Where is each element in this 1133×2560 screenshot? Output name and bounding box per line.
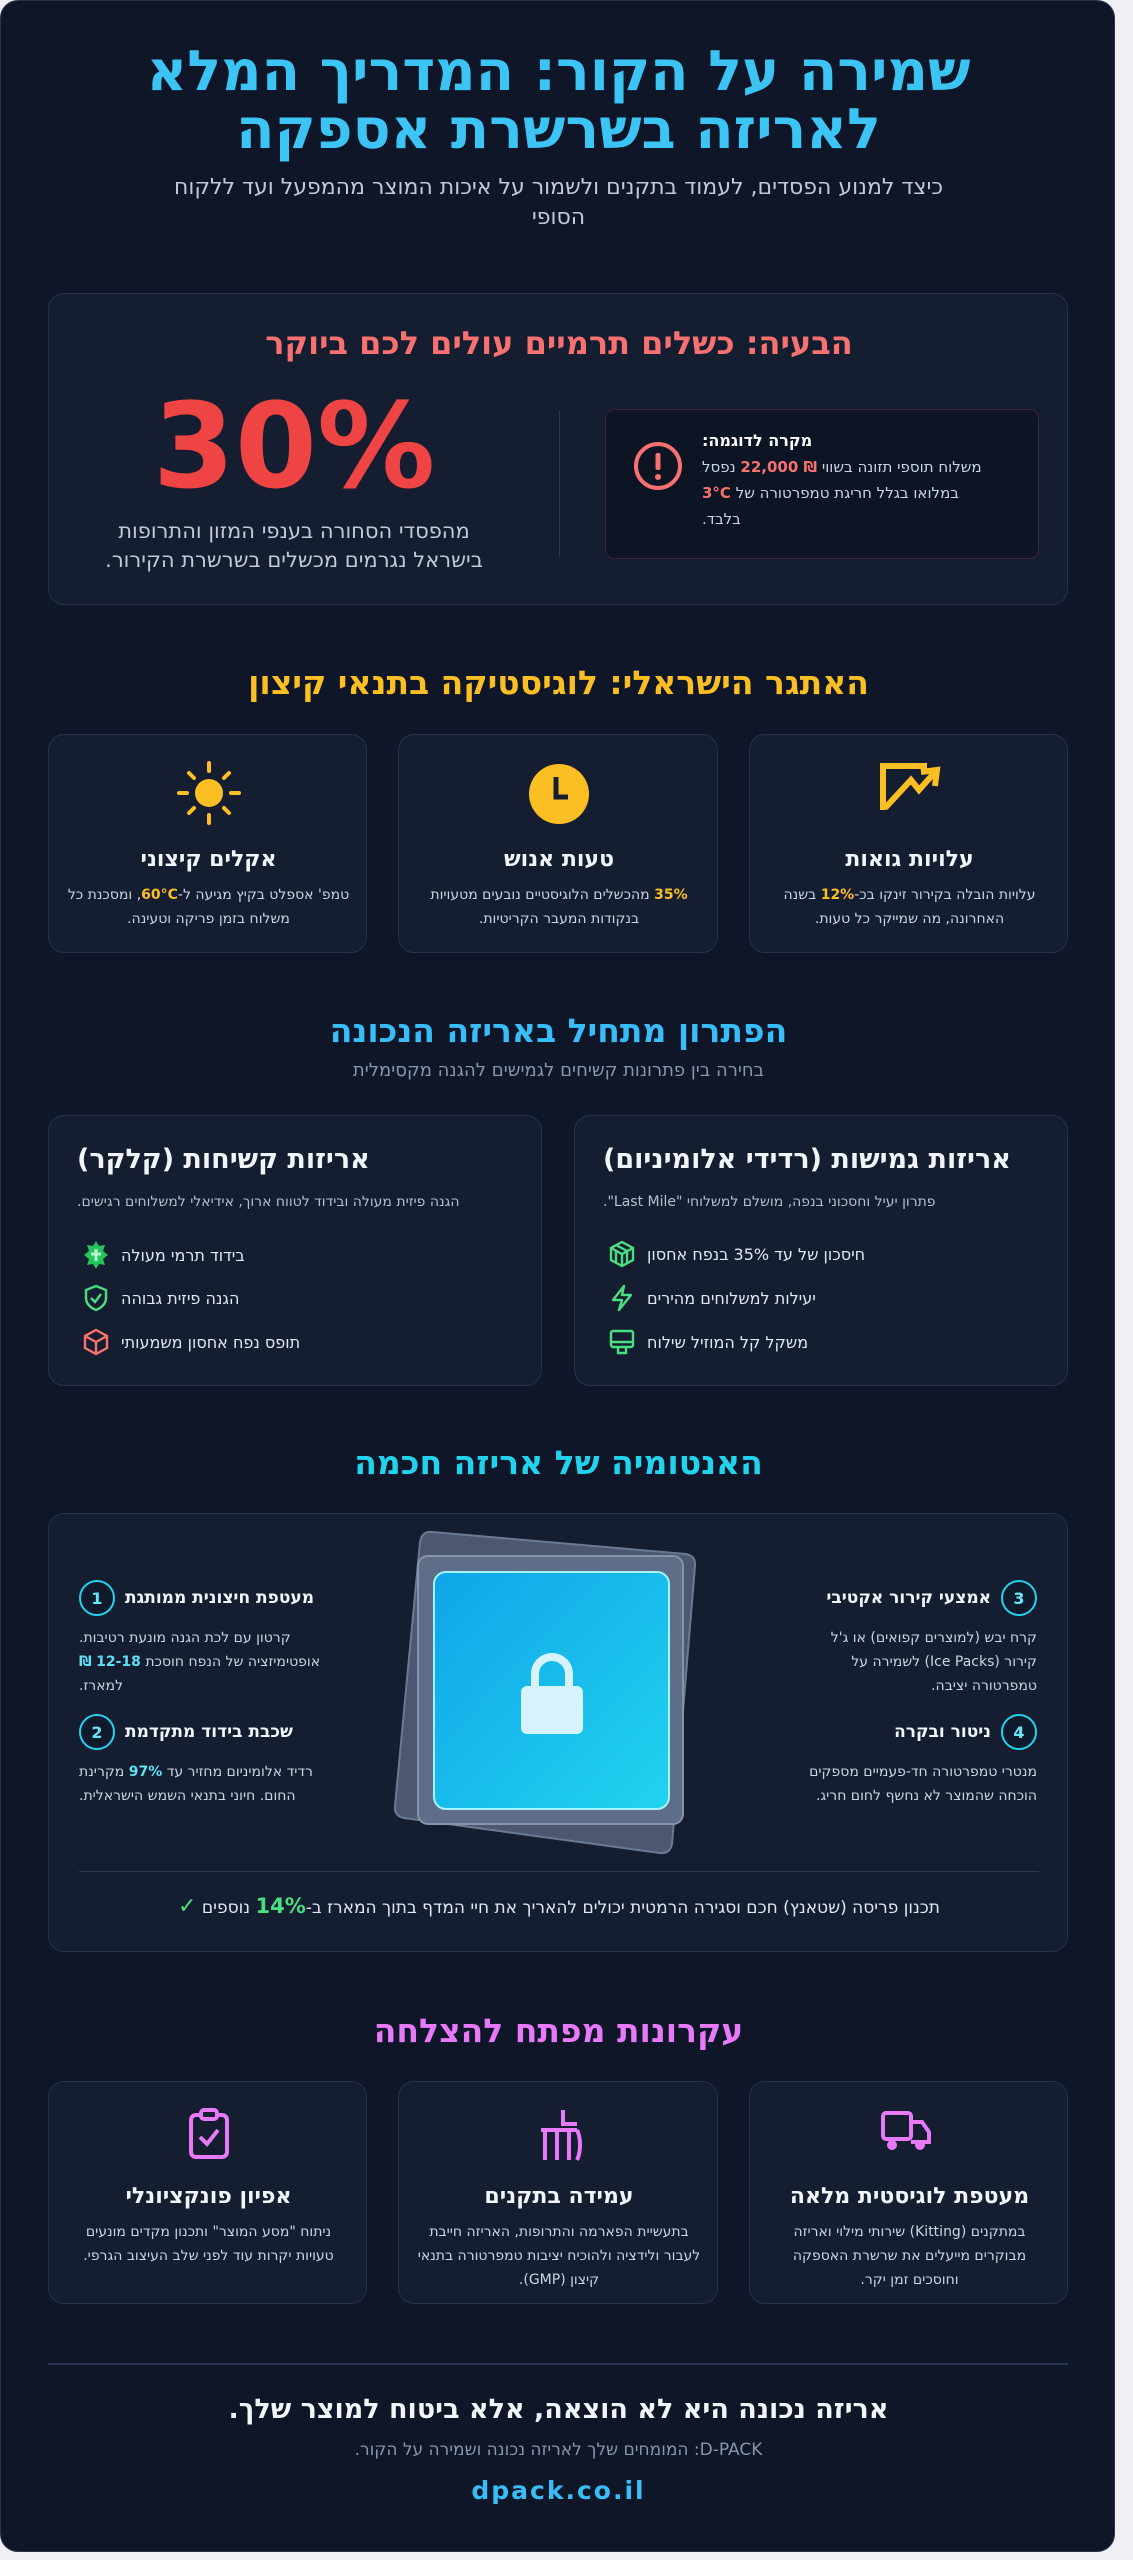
- footer url: dpack.co.il: [471, 2476, 646, 2505]
- item 2: insulation layer: 2: [91, 1722, 103, 1742]
- card: functional spec: אפיון פונקציונלי: [125, 2184, 292, 2209]
- title: שמירה על הקור: המדריך המלא: [146, 39, 970, 104]
- item: protection: הגנה פיזית גבוהה: [121, 1288, 239, 1308]
- panel: flexible packaging: פתרון יעיל וחסכוני בנפה, מושלם למשלוחי "Last Mile".: [603, 1194, 936, 1210]
- item 2: insulation layer: רדיד אלומיניום מחזיר עד 97% מקרינת החום. חיוני בתנאי השמש הישראלית.: [79, 1764, 313, 1804]
- item 3: active cooling: קרח יבש (למוצרים קפואים) או ג'ל קירור (Ice Packs) לשמירה על טמפרטורה יציבה.: [831, 1630, 1037, 1694]
- card: full logistics: מעטפת לוגיסטית מלאה: [790, 2184, 1029, 2209]
- icon: trending: [880, 763, 940, 810]
- card: costs: [749, 734, 1068, 953]
- heading: problem: הבעיה: כשלים תרמיים עולים לכם ביוקר: [265, 324, 853, 362]
- icon: alert: [634, 442, 682, 490]
- item 4: monitoring: מנטרי טמפרטורה חד-פעמיים מספקים הוכחה שהמוצר לא נחשף לחום חריג.: [809, 1764, 1037, 1804]
- panel: flexible packaging: אריזות גמישות (רדידי אלומיניום): [603, 1144, 1011, 1175]
- item 4: monitoring: 4: [1013, 1722, 1025, 1742]
- icon: clipboard: [189, 2108, 229, 2159]
- item 4: monitoring: [809, 1714, 1037, 1804]
- card: costs: עלויות הובלה בקירור זינקו בכ-12% בשנה האחרונה, מה שמייקר כל טעות.: [783, 887, 1036, 927]
- item 1: outer shell: [79, 1580, 320, 1694]
- heading: solution: הפתרון מתחיל באריזה הנכונה: [330, 1011, 787, 1050]
- panel: flexible packaging: [574, 1115, 1068, 1386]
- icon: sun: [177, 761, 241, 825]
- item 4: monitoring: ניטור ובקרה: [894, 1722, 991, 1742]
- item: insulation: בידוד תרמי מעולה: [121, 1246, 245, 1264]
- title: [146, 39, 970, 162]
- title: לאריזה בשרשרת אספקה: [236, 97, 881, 162]
- card: functional spec: ניתוח "מסע המוצר" ותכנון מקדים מונעים טעויות יקרות עוד לפני שלב העיצוב הגרפי.: [83, 2224, 334, 2264]
- panel: problem: [48, 293, 1068, 605]
- footer subline: D-PACK: המומחים שלך לאריזה נכונה ושמירה על הקור.: [355, 2440, 762, 2460]
- item: volume: [84, 1328, 300, 1356]
- item: savings: חיסכון של עד 35% בנפח אחסון: [647, 1244, 865, 1264]
- card: full logistics: [749, 2081, 1068, 2304]
- item 1: outer shell: 1: [91, 1588, 103, 1608]
- card: human error: [398, 734, 718, 953]
- item 1: outer shell: מעטפת חיצונית ממותגת: [125, 1588, 314, 1608]
- icon: truck: [881, 2111, 931, 2150]
- stat: 30%: 30%: [153, 377, 435, 515]
- card: standards: בתעשיית הפארמה והתרופות, האריזה חייבת לעבור ולידציה ולהוכיח יציבות טמפרטורה בתנאי קיצון (GMP).: [418, 2224, 700, 2288]
- panel: rigid packaging: הגנה פיזית מעולה ובידוד לטווח ארוך, אידיאלי למשלוחים רגישים.: [77, 1194, 460, 1210]
- heading: challenge: האתגר הישראלי: לוגיסטיקה בתנאי קיצון: [248, 663, 869, 702]
- card: human error: טעות אנוש: [504, 847, 614, 872]
- heading: anatomy: האנטומיה של אריזה חכמה: [354, 1443, 763, 1482]
- icon: clock: [529, 764, 589, 824]
- card: functional spec: [48, 2081, 367, 2304]
- icon: standards: [541, 2110, 582, 2161]
- item: efficiency: יעילות למשלוחים מהירים: [647, 1288, 816, 1308]
- item: insulation: [84, 1241, 245, 1269]
- item 1: outer shell: קרטון עם לכת הגנה מונעת רטיבות. אופטימיזציה של הנפח חוסכת 12-18 ₪ למארז.: [79, 1630, 320, 1694]
- item: light weight: [610, 1330, 808, 1354]
- card: human error: 35% מהכשלים הלוגיסטיים נובעים מטעויות בנקודות המעבר הקריטיות.: [430, 887, 688, 927]
- item: volume: תופס נפח אחסון משמעותי: [121, 1332, 300, 1352]
- item: protection: [84, 1284, 239, 1312]
- panel: anatomy: [48, 1513, 1068, 1952]
- card: climate: [48, 734, 367, 953]
- item 2: insulation layer: שכבת בידוד מתקדמת: [125, 1722, 293, 1742]
- footer headline: אריזה נכונה היא לא הוצאה, אלא ביטוח למוצר שלך.: [229, 2394, 888, 2425]
- panel: rigid packaging: [48, 1115, 542, 1386]
- card: standards: עמידה בתקנים: [484, 2184, 634, 2209]
- stat description: מהפסדי הסחורה בענפי המזון והתרופות בישראל נגרמים מכשלים בשרשרת הקירור.: [105, 519, 483, 572]
- example text: משלוח תוספי תזונה בשווי ₪ 22,000 נפסל במלואו בגלל חריגת טמפרטורה של 3°C בלבד.: [702, 458, 982, 528]
- item 3: active cooling: 3: [1013, 1588, 1025, 1608]
- item: efficiency: [612, 1284, 816, 1312]
- heading: principles: עקרונות מפתח להצלחה: [374, 2011, 743, 2050]
- card: standards: [398, 2081, 718, 2304]
- solution subtitle: בחירה בין פתרונות קשיחים לגמישים להגנה מקסימלית: [353, 1060, 764, 1081]
- callout: example case: [605, 409, 1039, 559]
- item 3: active cooling: אמצעי קירור אקטיבי: [826, 1588, 991, 1608]
- subtitle: כיצד למנוע הפסדים, לעמוד בתקנים ולשמור על איכות המוצר מהמפעל ועד ללקוח הסופי: [174, 175, 943, 230]
- card: climate: טמפ' אספלט בקיץ מגיעה ל-60°C, ומסכנת כל משלוח בזמן פריקה וטעינה.: [68, 887, 349, 927]
- card: climate: אקלים קיצוני: [140, 847, 277, 872]
- card: full logistics: במתקנים (Kitting) שירותי מילוי ואריזה מבוקרים מייעלים את שרשרת האספקה וחוסכים זמן יקר.: [793, 2224, 1026, 2288]
- item 3: active cooling: [826, 1580, 1037, 1694]
- panel: rigid packaging: אריזות קשיחות (קלקר): [77, 1144, 370, 1175]
- item: light weight: משקל קל המוזיל שילוח: [647, 1332, 808, 1352]
- example text: מקרה לדוגמה:: [702, 431, 812, 450]
- item 2: insulation layer: [79, 1714, 313, 1804]
- item: savings: [610, 1240, 865, 1268]
- illustration: smart package: [394, 1530, 696, 1854]
- card: costs: עלויות גואות: [845, 847, 974, 872]
- bottom note: תכנון פריסה (שטאנץ) חכם וסגירה הרמטית יכולים להאריך את חיי המדף בתוך המארז ב-14% נוספים ✓: [178, 1894, 940, 1919]
